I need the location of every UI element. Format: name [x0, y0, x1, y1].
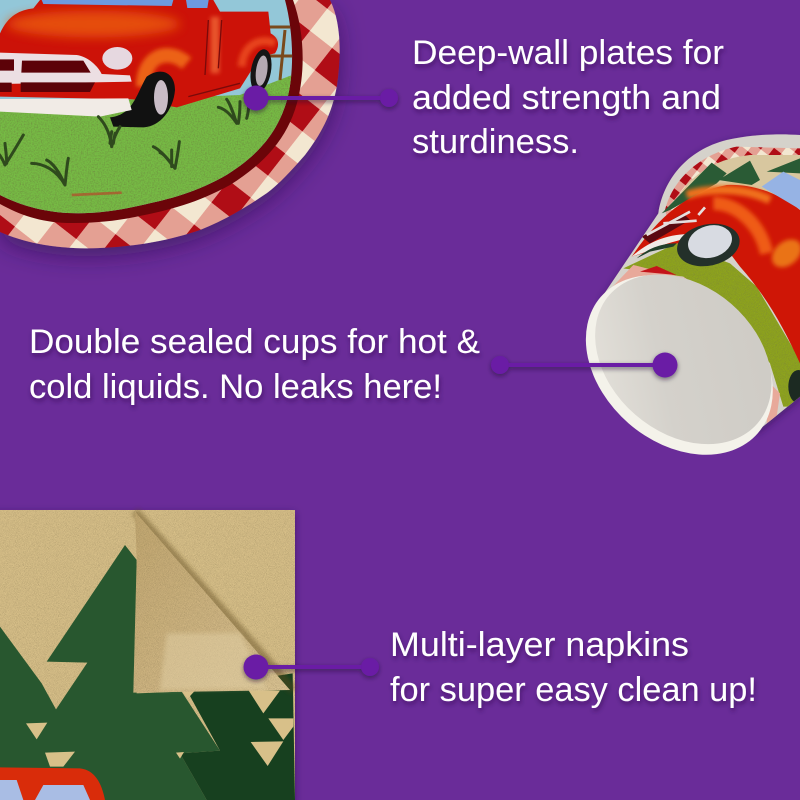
headlight — [102, 47, 132, 70]
bumper — [0, 98, 132, 117]
cup truck window — [762, 172, 800, 209]
truck body — [0, 0, 278, 107]
connector: napkin — [244, 654, 379, 680]
fender highlight — [143, 55, 187, 87]
fence — [270, 26, 292, 80]
text: plates: Deep-wall plates for — [412, 34, 724, 72]
cup gingham band — [665, 146, 800, 216]
panel: napkin — [0, 510, 295, 800]
panel: cup — [586, 133, 800, 455]
text: plates: sturdiness. — [412, 123, 579, 161]
cup lower wheel — [788, 370, 800, 403]
napkin shadow — [0, 510, 295, 800]
plate picture — [0, 0, 300, 220]
cup trees — [662, 158, 800, 213]
text: cups: Double sealed cups for hot & — [29, 323, 480, 361]
cup truck — [632, 185, 800, 363]
napkin truck roof — [0, 767, 105, 800]
cup base outer — [550, 238, 800, 492]
grass tufts — [0, 99, 249, 185]
cup grass — [623, 243, 800, 407]
napkin base — [0, 510, 295, 800]
napkin fold shadow — [135, 512, 293, 690]
text: plates — [412, 34, 724, 161]
door pillar — [211, 17, 219, 73]
rear hub — [254, 55, 269, 87]
cup base inner — [561, 240, 800, 479]
napkin truck windows — [0, 780, 90, 800]
cup wheel — [677, 224, 740, 266]
text: plates: added strength and — [412, 79, 721, 117]
copyright mark — [72, 193, 122, 195]
napkin flap — [133, 512, 290, 693]
cup tan band — [680, 155, 800, 197]
rear fender highlight — [242, 41, 275, 67]
cup grille — [642, 213, 690, 243]
text: cups — [29, 323, 480, 406]
cup truck highlight — [713, 203, 767, 253]
panel: plate — [0, 0, 340, 248]
tree dark green — [180, 673, 295, 800]
connector: plate — [244, 86, 398, 110]
text: napkins: for super easy clean up! — [390, 671, 757, 709]
rear wheel — [247, 48, 275, 94]
windows — [42, 0, 209, 8]
cup body — [600, 134, 800, 432]
front hub — [154, 80, 168, 115]
text: cups: cold liquids. No leaks here! — [29, 368, 442, 406]
grille slots — [0, 59, 95, 92]
tree light green — [0, 545, 220, 800]
tan triangles — [26, 690, 293, 767]
plate rim gingham — [0, 0, 340, 248]
text: napkins — [390, 626, 757, 709]
cup bumper — [632, 234, 685, 256]
plate dark ring — [0, 0, 303, 223]
grille — [0, 53, 132, 84]
cup gingham lower — [613, 265, 686, 286]
door lines — [188, 20, 240, 97]
napkin flap ribs — [160, 633, 267, 690]
text: napkins: Multi-layer napkins — [390, 626, 689, 664]
truck — [0, 0, 278, 195]
cup lower gingham — [767, 383, 780, 423]
front wheel — [110, 72, 175, 127]
body highlight — [7, 11, 180, 37]
cup hub — [688, 225, 732, 258]
connector: cup — [491, 352, 678, 378]
